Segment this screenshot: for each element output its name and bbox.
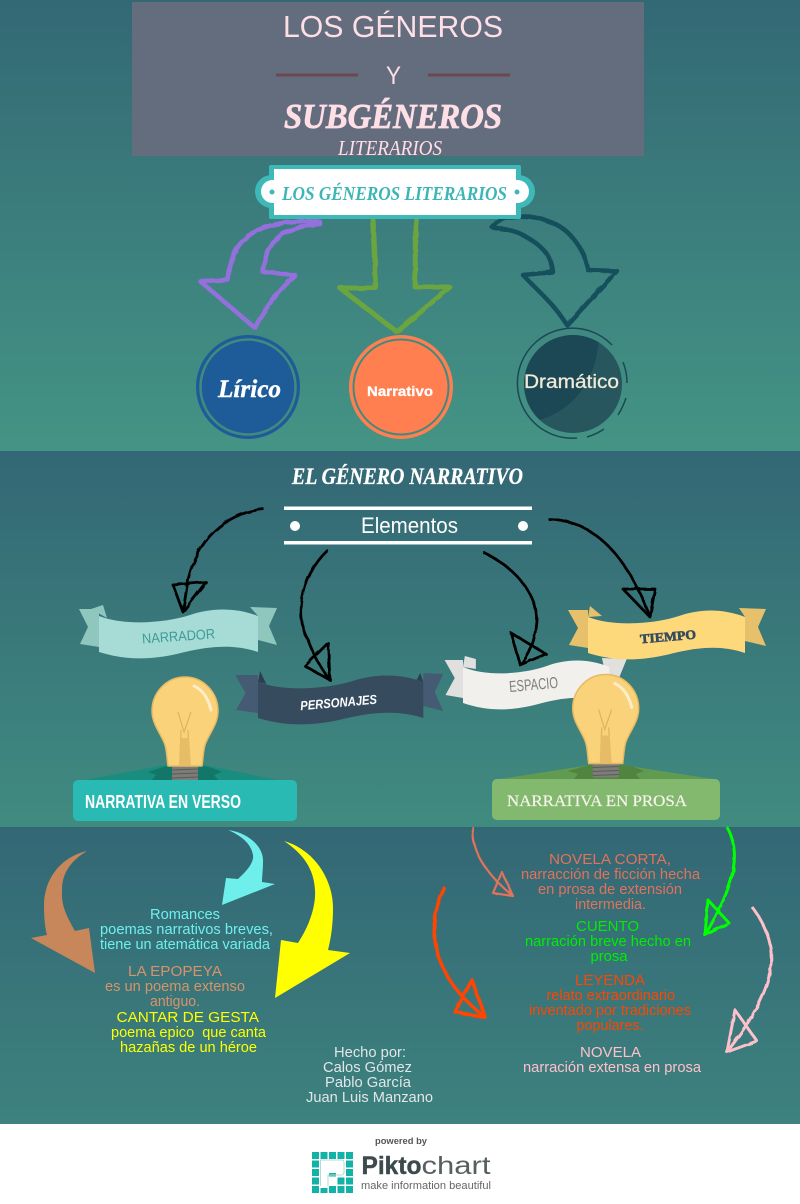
title: subgéneros: SUBGÉNEROS <box>284 97 502 136</box>
title: y with side rules: Y <box>386 62 401 90</box>
text: novela: NOVELA <box>580 1044 641 1061</box>
arrow: to narrador <box>173 509 264 612</box>
circle: lírico <box>196 335 300 439</box>
text: cuento <box>525 918 691 965</box>
text: leyenda <box>529 972 691 1034</box>
arrow: purple to lírico <box>200 221 320 328</box>
elementos label: Elementos <box>361 513 458 538</box>
arrow: dark to dramático <box>492 216 617 325</box>
arrow: cyan to romances <box>222 830 275 905</box>
text: novela corta <box>521 851 701 913</box>
text: novela corta: NOVELA CORTA, <box>549 851 671 868</box>
banner: los géneros literarios: LOS GÉNEROS LITERARIOS <box>281 182 507 205</box>
ribbon: personajes <box>235 671 443 724</box>
wordmark: piktochart <box>362 1152 491 1180</box>
panel: los géneros literarios <box>0 0 800 451</box>
panel: subgéneros <box>0 827 800 1124</box>
title block <box>132 2 644 160</box>
text: leyenda: populares. <box>576 1017 644 1034</box>
text: credits <box>306 1044 433 1106</box>
arrow: to tiempo <box>548 519 655 617</box>
text: romances: tiene un atemática variada <box>100 936 271 953</box>
text: cantar de gesta <box>111 1009 267 1056</box>
text: novela: narración extensa en prosa <box>523 1059 702 1076</box>
title: y with side rules <box>276 62 510 90</box>
circle: lírico: Lírico <box>217 376 281 403</box>
text: la epopeya: antiguo. <box>150 993 200 1010</box>
text: la epopeya: LA EPOPEYA <box>128 963 222 980</box>
text: novela <box>523 1044 702 1076</box>
title: los géneros: LOS GÉNEROS <box>283 9 503 44</box>
text: novela corta: narracción de ficción hecha <box>521 866 701 883</box>
text: romances: poemas narrativos breves, <box>100 921 273 938</box>
text: leyenda: inventado por tradiciones <box>529 1002 691 1019</box>
text: cantar de gesta: hazañas de un héroe <box>120 1039 257 1056</box>
text: novela corta: en prosa de extensión <box>538 881 682 898</box>
arrow: to espacio <box>483 552 546 665</box>
arrow: green to cuento <box>705 827 734 935</box>
elementos label <box>284 506 532 544</box>
text: cuento: prosa <box>590 948 628 965</box>
circle: dramático <box>510 325 627 438</box>
circle: narrativo <box>349 335 453 439</box>
banner: los géneros literarios <box>255 165 535 219</box>
text: credits: Pablo García <box>325 1074 412 1091</box>
card: narrativa en verso with bulb: NARRATIVA EN VERSO <box>85 792 241 812</box>
ribbon: tiempo: TIEMPO <box>639 627 697 646</box>
panel: el género narrativo <box>0 451 800 827</box>
heading: el género narrativo: EL GÉNERO NARRATIVO <box>291 464 523 489</box>
arrow: tan to la epopeya <box>31 851 95 973</box>
arrow: pink to novela <box>727 907 771 1052</box>
text: cantar de gesta: poema epico que canta <box>111 1024 267 1041</box>
arrow: orange to leyenda <box>434 887 485 1017</box>
circle: narrativo: Narrativo <box>367 383 433 399</box>
arrow: green to narrativo <box>340 219 450 332</box>
text: romances: Romances <box>150 906 220 923</box>
text: credits: Calos Gómez <box>323 1059 412 1076</box>
wordmark: piktochart: chart <box>422 1152 491 1180</box>
text: cuento: CUENTO <box>576 918 639 935</box>
title: literarios: LITERARIOS <box>337 136 442 160</box>
icon: piktochart logo <box>312 1152 353 1193</box>
tagline: make information beautiful <box>361 1180 491 1192</box>
ribbon: narrador: NARRADOR <box>142 625 215 646</box>
wordmark: piktochart: Pikto <box>362 1152 422 1180</box>
powered by label: powered by <box>375 1136 428 1147</box>
text: credits: Juan Luis Manzano <box>306 1089 433 1106</box>
circle: dramático: Dramático <box>524 372 619 393</box>
ribbon: personajes: PERSONAJES <box>300 692 378 713</box>
text: leyenda: relato extraordinario <box>546 987 675 1004</box>
arrow: salmon to novela corta <box>473 827 513 896</box>
text: cuento: narración breve hecho en <box>525 933 691 950</box>
ribbon: narrador <box>79 605 277 658</box>
ribbon: tiempo <box>568 606 766 659</box>
ribbon: espacio <box>445 656 627 709</box>
icon: light bulb <box>573 674 639 778</box>
card: narrativa en prosa with bulb <box>492 674 720 820</box>
ribbon: espacio: ESPACIO <box>508 675 559 696</box>
text: novela corta: intermedia. <box>575 896 646 913</box>
arrow: to personajes <box>301 550 330 680</box>
text: credits: Hecho por: <box>334 1044 406 1061</box>
card: narrativa en prosa with bulb: NARRATIVA EN PROSA <box>507 793 688 810</box>
text: leyenda: LEYENDA <box>575 972 645 989</box>
arrow: yellow to cantar de gesta <box>275 841 350 998</box>
icon: light bulb <box>152 677 218 780</box>
text: romances <box>100 906 273 953</box>
text: la epopeya: es un poema extenso <box>105 978 245 995</box>
footer: powered by piktochart <box>0 1124 800 1204</box>
text: la epopeya <box>105 963 245 1010</box>
text: cantar de gesta: CANTAR DE GESTA <box>116 1009 259 1026</box>
card: narrativa en verso with bulb <box>73 677 297 821</box>
